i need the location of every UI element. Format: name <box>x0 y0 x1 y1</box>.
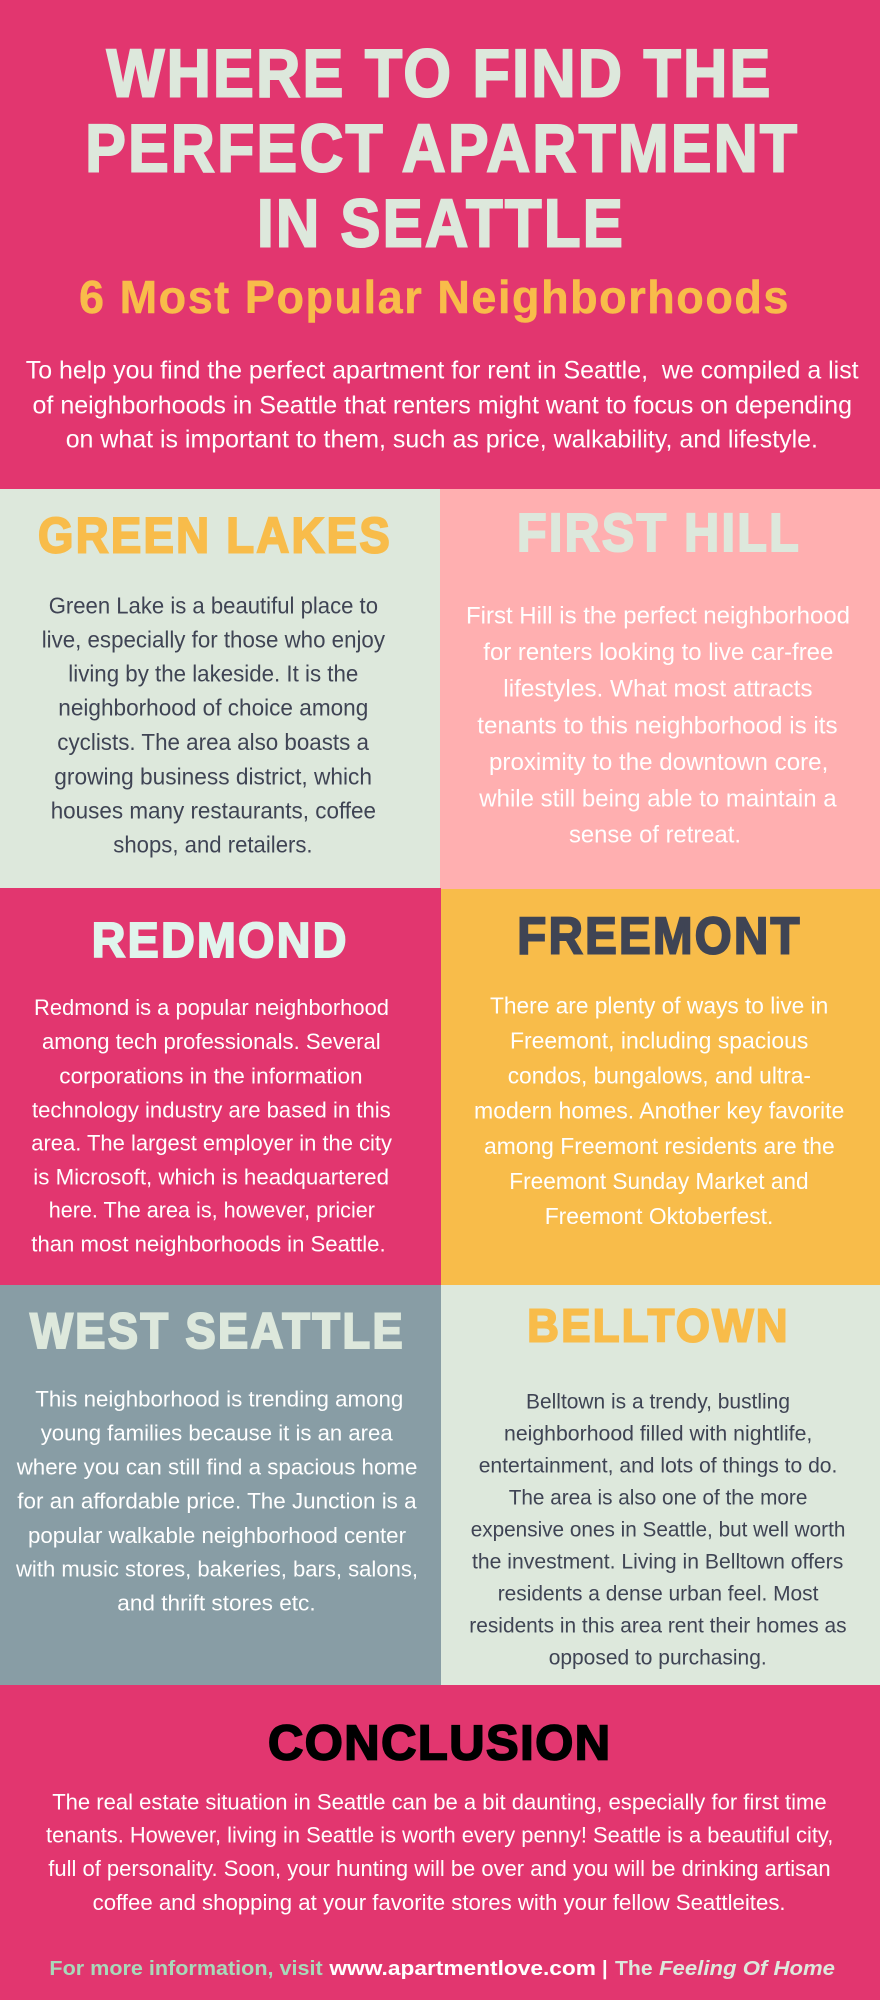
heading: WEST SEATTLE <box>30 1303 405 1359</box>
panel: conclusion <box>46 1716 833 1915</box>
body text: corporations in the information <box>59 1063 363 1088</box>
body text: than most neighborhoods in Seattle. <box>31 1232 386 1257</box>
body text: tenants to this neighborhood is its <box>477 712 838 739</box>
body text <box>31 995 393 1257</box>
panel: Green Lakes <box>0 489 440 888</box>
intro text: of neighborhoods in Seattle that renters might want to focus on depending <box>32 391 852 419</box>
footer line <box>49 1958 835 1980</box>
body text: here. The area is, however, pricier <box>49 1198 375 1223</box>
header section <box>26 36 859 454</box>
body text: modern homes. Another key favorite <box>474 1097 844 1123</box>
title <box>85 36 799 262</box>
body text <box>15 1387 418 1616</box>
panel: West Seattle <box>0 1285 441 1685</box>
body text <box>469 1389 847 1669</box>
body text: First Hill is the perfect neighborhood <box>466 602 850 629</box>
conclusion heading: CONCLUSION <box>268 1716 612 1770</box>
body text: The area is also one of the more <box>509 1485 807 1509</box>
heading: FREEMONT <box>517 906 802 964</box>
body text <box>474 992 844 1229</box>
body text: Redmond is a popular neighborhood <box>34 995 389 1020</box>
body text: Freemont Sunday Market and <box>509 1168 809 1194</box>
heading: BELLTOWN <box>527 1300 790 1352</box>
conclusion text: tenants. However, living in Seattle is worth every penny! Seattle is a beautiful city, <box>46 1822 833 1847</box>
panel background <box>440 489 880 889</box>
body text: Freemont, including spacious <box>510 1027 808 1053</box>
title: WHERE TO FIND THE <box>107 36 773 112</box>
body text: is Microsoft, which is headquartered <box>33 1164 389 1189</box>
intro text <box>26 356 859 454</box>
panel background <box>0 888 441 1285</box>
body text: living by the lakeside. It is the <box>68 661 358 687</box>
body text: lifestyles. What most attracts <box>503 676 813 703</box>
body text: while still being able to maintain a <box>478 786 837 813</box>
body text: where you can still find a spacious home <box>16 1455 417 1480</box>
body text <box>42 592 385 857</box>
body text: for renters looking to live car-free <box>483 639 833 666</box>
body text: live, especially for those who enjoy <box>42 626 385 652</box>
title: IN SEATTLE <box>257 186 625 262</box>
panel background <box>441 889 880 1285</box>
intro text: To help you find the perfect apartment for rent in Seattle, we compiled a list <box>26 356 859 384</box>
body text <box>466 602 850 849</box>
panel: Freemont <box>441 889 880 1285</box>
panel background <box>441 1285 880 1685</box>
body text: residents a dense urban feel. Most <box>498 1581 818 1605</box>
title: PERFECT APARTMENT <box>85 110 799 186</box>
panel: Redmond <box>0 888 441 1285</box>
body text: neighborhood filled with nightlife, <box>504 1421 812 1445</box>
body text: neighborhood of choice among <box>58 695 368 721</box>
intro text: on what is important to them, such as price, walkability, and lifestyle. <box>66 426 818 454</box>
panel background <box>0 1285 441 1685</box>
footer line: For more information, visit <box>49 1958 323 1980</box>
panel: First Hill <box>440 489 880 889</box>
footer line: www.apartmentlove.com <box>328 1958 596 1980</box>
body text: the investment. Living in Belltown offers <box>472 1549 843 1573</box>
body text: This neighborhood is trending among <box>35 1387 403 1412</box>
panel: Belltown <box>441 1285 880 1685</box>
body text: among Freemont residents are the <box>484 1133 835 1159</box>
subtitle: 6 Most Popular Neighborhoods <box>79 271 790 323</box>
heading: GREEN LAKES <box>38 508 392 564</box>
heading: REDMOND <box>92 913 349 968</box>
body text: proximity to the downtown core, <box>489 749 828 776</box>
body text: among tech professionals. Several <box>42 1029 381 1054</box>
body text: popular walkable neighborhood center <box>28 1523 406 1548</box>
body text: cyclists. The area also boasts a <box>57 729 369 755</box>
body text: opposed to purchasing. <box>549 1645 767 1669</box>
body text: shops, and retailers. <box>113 831 313 857</box>
body text: young families because it is an area <box>41 1421 393 1446</box>
body text: entertainment, and lots of things to do. <box>479 1453 837 1477</box>
body text: There are plenty of ways to live in <box>490 992 828 1018</box>
conclusion text <box>46 1789 833 1915</box>
body text: condos, bungalows, and ultra- <box>508 1062 811 1088</box>
body text: with music stores, bakeries, bars, salons, <box>15 1557 418 1582</box>
conclusion text: The real estate situation in Seattle can be a bit daunting, especially for first time <box>52 1789 827 1814</box>
body text: and thrift stores etc. <box>117 1591 316 1616</box>
footer line: The <box>615 1958 653 1980</box>
body text: growing business district, which <box>54 763 372 789</box>
body text: residents in this area rent their homes as <box>469 1613 847 1637</box>
conclusion text: coffee and shopping at your favorite stores with your fellow Seattleites. <box>93 1890 786 1915</box>
body text: houses many restaurants, coffee <box>51 797 376 823</box>
footer line: | <box>602 1958 608 1980</box>
body text: expensive ones in Seattle, but well worth <box>471 1517 845 1541</box>
body text: technology industry are based in this <box>32 1097 391 1122</box>
footer line: Feeling Of Home <box>659 1958 835 1980</box>
conclusion text: full of personality. Soon, your hunting will be over and you will be drinking artisan <box>48 1856 831 1881</box>
heading: FIRST HILL <box>517 504 801 563</box>
body text: area. The largest employer in the city <box>31 1131 393 1156</box>
body text: Freemont Oktoberfest. <box>545 1203 773 1229</box>
body text: Green Lake is a beautiful place to <box>49 592 378 618</box>
panel background <box>0 489 440 888</box>
body text: sense of retreat. <box>569 822 741 849</box>
body text: Belltown is a trendy, bustling <box>526 1389 790 1413</box>
body text: for an affordable price. The Junction is a <box>17 1489 417 1514</box>
